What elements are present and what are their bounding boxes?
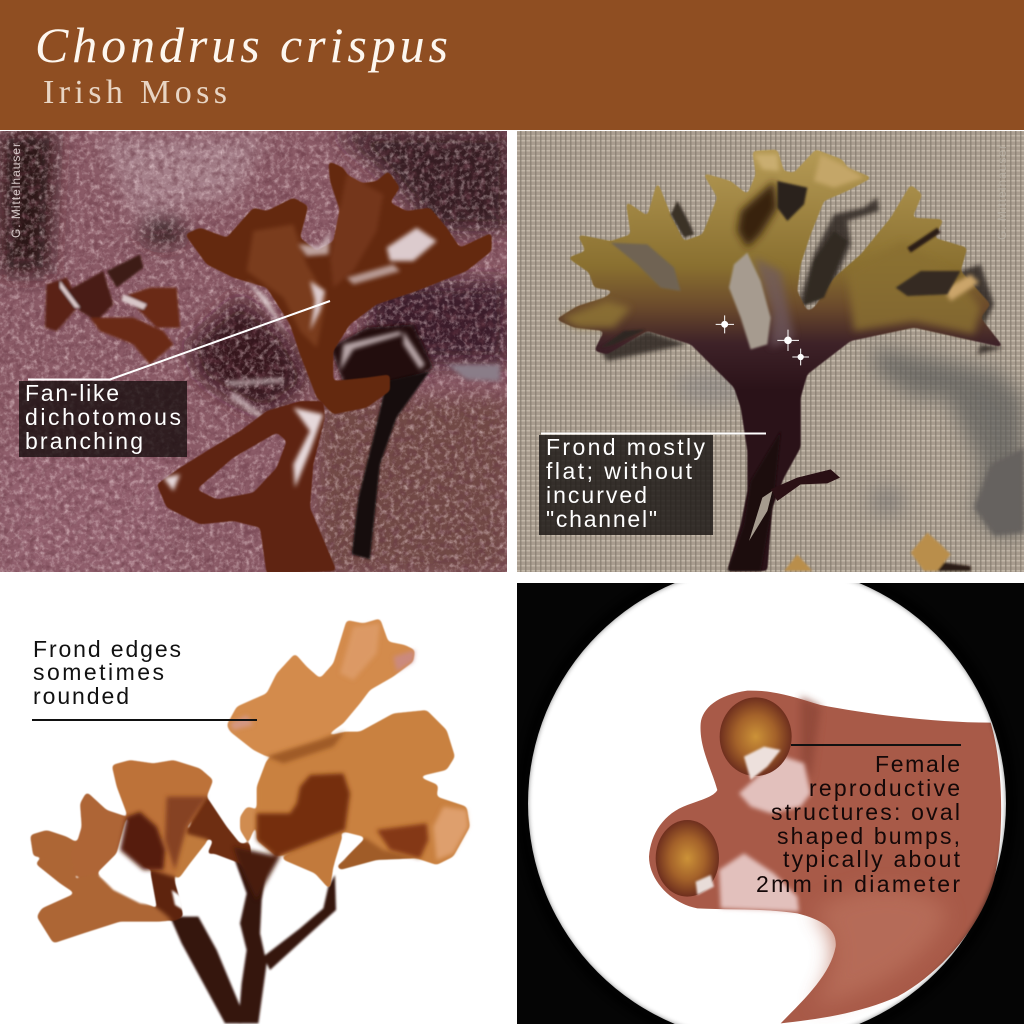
pale reflections <box>719 757 811 912</box>
subtitle: Irish Moss <box>43 74 227 111</box>
callout: female structures: reproductive <box>809 775 960 801</box>
lower frond <box>157 401 337 574</box>
callout box: frond flat: "channel" <box>546 506 657 532</box>
callout box: frond flat: incurved <box>546 482 647 508</box>
frond shadows <box>601 198 1004 361</box>
small frond fragments <box>784 533 971 571</box>
panel: fan-like branching photo <box>0 131 510 574</box>
callout: rounded edges: sometimes <box>33 659 164 685</box>
title: Chondrus crispus <box>35 17 448 73</box>
olive frond <box>556 149 1004 571</box>
callout: rounded edges: Frond edges <box>33 636 181 662</box>
callout: rounded edges: rounded <box>33 683 129 709</box>
callout: female structures: typically about <box>783 846 961 872</box>
callout: female structures: 2mm in diameter <box>756 871 960 897</box>
callout box: branching: Fan-like <box>25 380 119 406</box>
frond gaps <box>601 181 961 349</box>
stems <box>170 860 336 1023</box>
callout box: branching <box>19 301 330 457</box>
panel: flat frond photo <box>517 131 1024 572</box>
frond shading and stem <box>561 154 981 571</box>
callout box: frond flat: Frond mostly <box>546 434 706 460</box>
left frond cluster <box>45 254 180 364</box>
credit: G. Mittelhauser <box>9 143 23 238</box>
tissue tones <box>814 888 947 1007</box>
header banner <box>0 0 1024 130</box>
callout box: frond flat: flat; without <box>546 458 693 484</box>
frond tissue <box>649 691 1001 1023</box>
lens vignette <box>522 558 1012 1024</box>
water droplet <box>974 448 1024 536</box>
dark centre and curled frond <box>333 322 436 382</box>
frond shading <box>120 623 468 900</box>
sparkles <box>716 315 809 365</box>
panel: rounded frond edges specimen <box>30 618 470 1023</box>
amber fronds <box>30 618 470 943</box>
credit: G. Mittelhauser <box>995 145 1009 240</box>
callout box: branching: branching <box>25 428 143 454</box>
main frond <box>185 161 492 414</box>
callout: female structures: shaped bumps, <box>777 823 960 849</box>
reproductive bump lower <box>656 820 719 897</box>
microscope field <box>528 564 1006 1024</box>
callout box: branching: dichotomous <box>25 404 181 430</box>
callout: female structures: structures: oval <box>771 799 960 825</box>
reproductive bump upper <box>720 697 792 780</box>
callout: female structures: Female <box>875 751 960 777</box>
gaps between fronds <box>98 837 360 910</box>
callout: female structures <box>756 745 961 897</box>
panel: microscope view of reproductive structures <box>517 558 1024 1024</box>
callout box: frond flat <box>539 434 766 535</box>
gloss highlights <box>227 228 500 421</box>
callout: rounded edges <box>32 636 257 720</box>
